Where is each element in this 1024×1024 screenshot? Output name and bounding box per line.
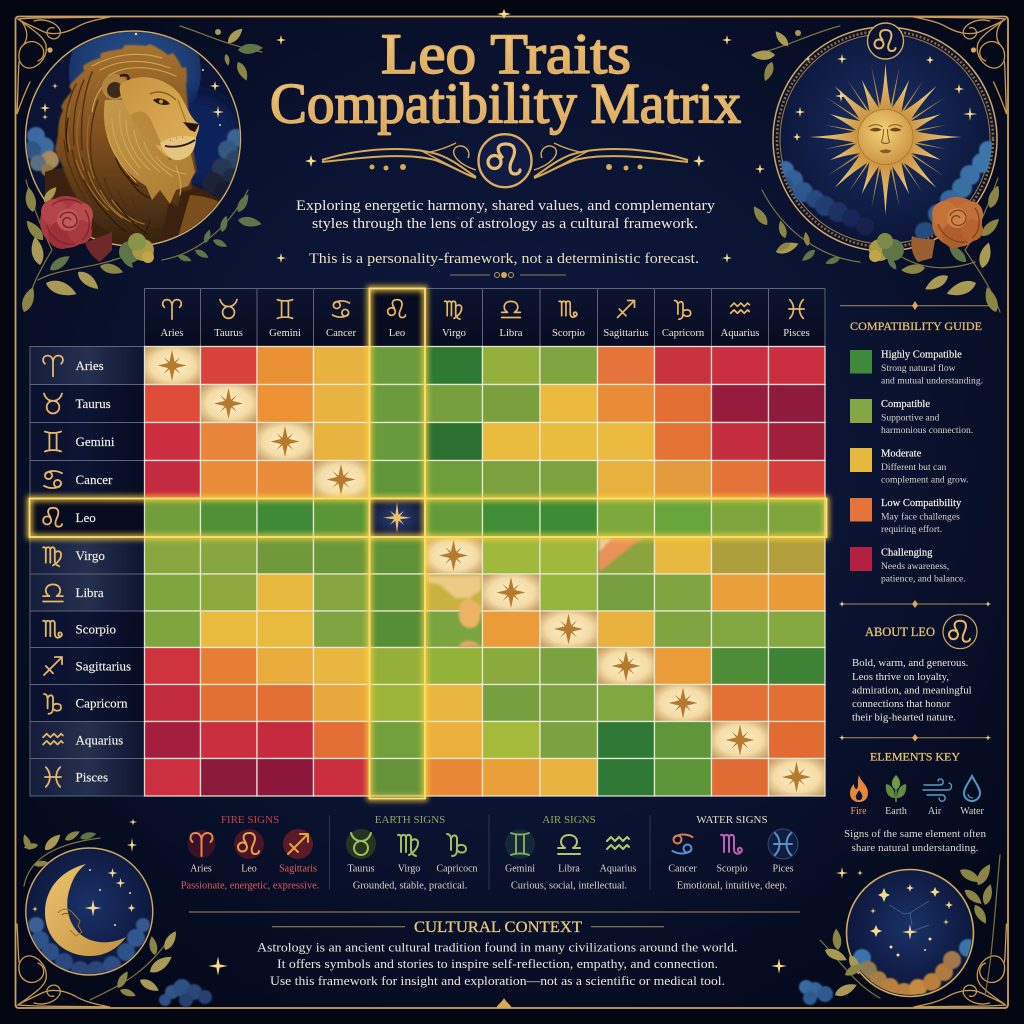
body text: connections that honor xyxy=(852,698,951,710)
header: Scorpio: Scorpio xyxy=(552,328,585,339)
sun clouds xyxy=(776,141,997,242)
illustration: lion medallion xyxy=(24,30,242,246)
heading: ABOUT LEO xyxy=(865,625,935,639)
legend: compatible xyxy=(850,399,973,436)
header: Gemini: Gemini xyxy=(269,328,301,339)
panel: earth signs xyxy=(346,814,478,892)
legend: challenging xyxy=(850,547,966,584)
panel: air signs: Aquarius xyxy=(600,864,636,874)
note xyxy=(844,829,986,854)
panel: water signs: Emotional, intuitive, deep. xyxy=(677,880,787,892)
row labels xyxy=(30,346,144,796)
legend: highly compatible: Highly Compatible xyxy=(881,350,962,360)
row label: Aquarius xyxy=(30,722,144,758)
header: Virgo: Virgo xyxy=(442,328,466,339)
row label: Virgo xyxy=(30,537,144,574)
panel: water signs: Pices xyxy=(772,864,794,874)
row label: Gemini xyxy=(30,422,144,460)
panel: earth signs: EARTH SIGNS xyxy=(375,814,445,826)
icon: fire xyxy=(850,775,868,817)
bottom center ornament xyxy=(496,998,512,1008)
legend: highly compatible: and mutual understanding. xyxy=(881,376,983,386)
Leo row and column highlight xyxy=(30,288,826,798)
legend: challenging: Challenging xyxy=(881,548,933,558)
body text xyxy=(257,940,738,988)
corner ornament: top right xyxy=(914,17,1006,114)
row label: Taurus xyxy=(30,384,144,422)
header: Taurus xyxy=(200,288,257,346)
illustration: sun medallion xyxy=(755,23,997,251)
illustration: leaf branch lower left of sun xyxy=(750,190,860,266)
header: Libra xyxy=(482,288,540,346)
header: Leo: Leo xyxy=(389,328,405,339)
corner ornament: bottom left xyxy=(17,924,110,1007)
body text: It offers symbols and stories to inspire self-reflection, empathy, and connection. xyxy=(277,956,718,971)
legend: compatible: Supportive and xyxy=(881,412,940,424)
illustration: right floral cluster with rose xyxy=(869,178,1002,314)
panel: water signs: WATER SIGNS xyxy=(696,814,768,826)
row label: Gemini: Gemini xyxy=(76,434,115,449)
legend: low compatibility xyxy=(850,498,962,535)
legend: highly compatible: Strong natural flow xyxy=(881,363,956,374)
matrix row: Aquarius xyxy=(144,722,825,758)
body text: Bold, warm, and generous. xyxy=(852,657,968,669)
elements key panel xyxy=(839,734,991,854)
subtitle xyxy=(296,198,716,232)
illustration: leaf branch top left xyxy=(180,26,264,82)
row label: Leo xyxy=(30,498,144,537)
icon: air xyxy=(923,779,952,817)
header: Pisces: Pisces xyxy=(783,328,810,339)
header: Libra: Libra xyxy=(500,328,523,339)
header: Pisces xyxy=(768,288,825,346)
row label: Pisces xyxy=(30,758,144,796)
illustration: left floral cluster with rose xyxy=(19,180,154,314)
matrix row: Capricorn xyxy=(144,684,825,722)
icon: Leo badge on sun ring xyxy=(868,23,904,59)
heading: CULTURAL CONTEXT xyxy=(414,919,583,936)
divider xyxy=(839,734,991,742)
note: Signs of the same element often xyxy=(844,829,986,840)
divider xyxy=(840,301,990,310)
row label: Capricorn: Capricorn xyxy=(76,696,128,710)
panel: fire signs: Sagittaris xyxy=(279,864,317,874)
lion clouds xyxy=(23,127,246,203)
panel: air signs: Libra xyxy=(558,864,580,874)
emblem: Leo flourish divider xyxy=(305,134,705,187)
title: Leo Traits xyxy=(381,23,631,86)
disclaimer: This is a personality-framework, not a deterministic forecast. xyxy=(309,251,699,267)
panel: air signs: Curious, social, intellectual. xyxy=(511,880,627,892)
panel: earth signs: Virgo xyxy=(398,864,420,874)
panel: fire signs: Aries xyxy=(190,864,212,874)
corner ornament: top left xyxy=(17,17,110,114)
row label: Libra: Libra xyxy=(76,585,104,600)
matrix row: Gemini xyxy=(144,422,825,460)
body text: Leos thrive on loyalty, xyxy=(852,671,949,683)
matrix row: Aries xyxy=(144,346,825,384)
body text xyxy=(852,657,972,724)
illustration: constellation medallion xyxy=(846,870,977,1001)
row label: Pisces: Pisces xyxy=(76,770,108,784)
header: Aries: Aries xyxy=(161,328,183,339)
matrix row: Taurus xyxy=(144,384,825,422)
header: Aquarius: Aquarius xyxy=(721,328,759,339)
body text: Astrology is an ancient cultural tradition found in many civilizations around the world. xyxy=(257,940,738,955)
legend: moderate: complement and grow. xyxy=(881,474,969,486)
subtitle: Exploring energetic harmony, shared values, and complementary xyxy=(296,198,716,214)
heading: COMPATIBILITY GUIDE xyxy=(850,320,982,333)
panel: air signs xyxy=(505,814,636,892)
element signs strip xyxy=(181,814,798,892)
icon: Leo badge xyxy=(943,615,977,649)
panel: earth signs: Capricocn xyxy=(436,864,478,874)
icon: earth xyxy=(885,775,907,817)
heading: ELEMENTS KEY xyxy=(870,750,960,764)
row label: Cancer: Cancer xyxy=(76,472,113,487)
matrix row: Pisces xyxy=(144,758,825,796)
legend: moderate: Moderate xyxy=(881,448,922,460)
illustration: moon foliage xyxy=(21,819,212,1007)
icon: fire: Fire xyxy=(850,806,867,817)
header: Cancer xyxy=(314,288,370,346)
panel: fire signs: Passionate, energetic, expressive. xyxy=(181,880,319,892)
row label: Capricorn xyxy=(30,684,144,722)
matrix row: Sagittarius xyxy=(144,648,825,684)
row label: Libra xyxy=(30,574,144,611)
cultural context section xyxy=(189,912,800,988)
header: Leo xyxy=(370,288,425,346)
about Leo panel xyxy=(839,600,991,724)
row label: Scorpio xyxy=(30,611,144,648)
matrix row: Cancer xyxy=(144,460,825,498)
panel: water signs: Scorpio xyxy=(716,864,748,874)
panel: air signs: Gemini xyxy=(505,864,535,874)
legend: moderate xyxy=(850,448,969,486)
header: Capricorn: Capricorn xyxy=(662,328,705,339)
legend: compatible: harmonious connection. xyxy=(881,425,973,436)
small ornament below disclaimer xyxy=(450,272,566,278)
row label: Taurus: Taurus xyxy=(76,396,111,411)
row label: Sagittarius xyxy=(30,648,144,684)
matrix row: Scorpio xyxy=(144,611,825,648)
header: Capricorn xyxy=(654,288,712,346)
matrix blotches in cells xyxy=(427,538,642,647)
body text: admiration, and meaningful xyxy=(852,684,972,696)
panel: fire signs: Leo xyxy=(241,864,257,874)
header: Gemini xyxy=(257,288,314,346)
panel: earth signs: Taurus xyxy=(347,864,375,874)
panel: water signs: Cancer xyxy=(668,864,697,874)
illustration: leaf branch lower right of lion xyxy=(162,190,262,263)
body text: Use this framework for insight and exploration—not as a scientific or medical tool. xyxy=(270,973,725,988)
matrix row: Virgo xyxy=(144,537,825,574)
panel: water signs xyxy=(668,814,798,892)
row label: Virgo: Virgo xyxy=(76,548,105,563)
title xyxy=(270,23,741,136)
legend: low compatibility: requiring effort. xyxy=(881,524,942,535)
decorative sparkles around title xyxy=(276,9,732,263)
header: Cancer: Cancer xyxy=(326,328,356,339)
row label: Cancer xyxy=(30,460,144,498)
icon: water: Water xyxy=(960,806,984,817)
header: Scorpio xyxy=(540,288,598,346)
icon: earth: Earth xyxy=(885,806,907,817)
subtitle: styles through the lens of astrology as a cultural framework. xyxy=(312,216,698,232)
icon: water xyxy=(960,776,984,817)
row label: Aquarius: Aquarius xyxy=(76,732,123,748)
header: Aquarius xyxy=(712,288,768,346)
star markers on matrix diagonal xyxy=(158,350,811,792)
header: Sagittarius xyxy=(598,288,654,346)
illustration: leaf branch top right xyxy=(751,26,840,83)
divider xyxy=(839,600,991,608)
row label: Leo: Leo xyxy=(76,510,96,525)
legend: moderate: Different but can xyxy=(881,462,947,473)
matrix row: Libra xyxy=(144,574,825,611)
note: share natural understanding. xyxy=(852,843,978,854)
header: Virgo xyxy=(425,288,482,346)
column headers xyxy=(144,288,825,346)
illustration: moon medallion xyxy=(26,848,153,979)
legend: highly compatible xyxy=(850,350,983,386)
title: Compatibility Matrix xyxy=(270,72,741,136)
header: Sagittarius: Sagittarius xyxy=(603,328,649,339)
row label: Sagittarius: Sagittarius xyxy=(76,658,131,674)
icon: air: Air xyxy=(928,806,942,817)
panel: fire signs: FIRE SIGNS xyxy=(221,814,279,826)
row label: Aries: Aries xyxy=(76,358,104,373)
matrix row: Leo xyxy=(144,498,825,537)
legend: low compatibility: Low Compatibility xyxy=(881,498,962,509)
legend: challenging: Needs awareness, xyxy=(881,561,949,572)
legend: compatible: Compatible xyxy=(881,399,930,410)
illustration: constellation foliage xyxy=(799,855,1000,1005)
compatibility guide panel xyxy=(840,301,990,584)
panel: fire signs xyxy=(181,814,319,892)
row label: Aries xyxy=(30,346,144,384)
legend: low compatibility: May face challenges xyxy=(881,512,960,522)
row label: Scorpio: Scorpio xyxy=(76,622,116,636)
compatibility matrix cells xyxy=(144,346,825,796)
header: Taurus: Taurus xyxy=(214,328,243,339)
panel: earth signs: Grounded, stable, practical. xyxy=(353,880,467,892)
panel: air signs: AIR SIGNS xyxy=(542,814,596,826)
corner ornament: bottom right xyxy=(914,924,1006,1007)
header: Aries xyxy=(144,288,200,346)
body text: their big-hearted nature. xyxy=(852,712,956,724)
legend: challenging: patience, and balance. xyxy=(881,574,966,584)
